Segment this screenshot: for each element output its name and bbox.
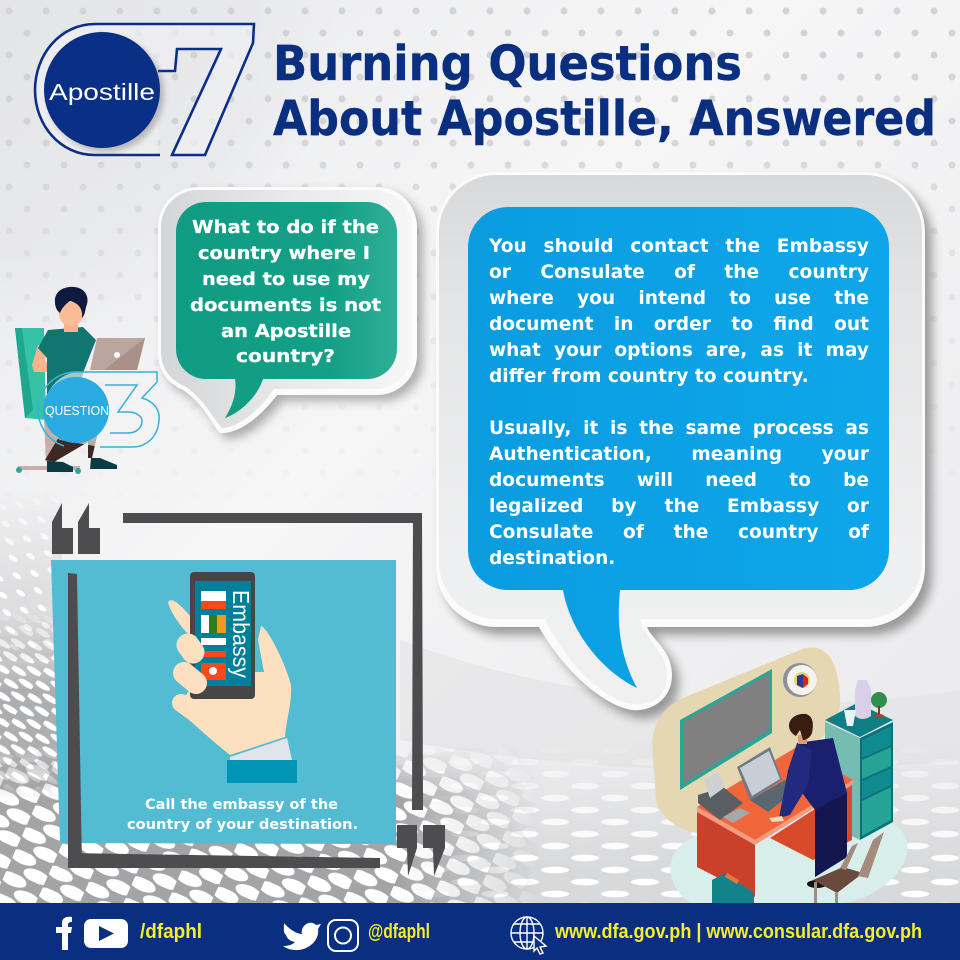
answer text: legalized by the Embassy or: [489, 496, 869, 517]
closing quote marks: [397, 825, 445, 876]
fax: [698, 772, 750, 823]
answer text: where you intend to use the: [489, 288, 869, 309]
frame lines: [68, 513, 423, 868]
websites: www.dfa.gov.ph | www.consular.dfa.gov.ph: [554, 921, 922, 943]
logo: Apostille 7: Apostille: [49, 79, 155, 105]
title: [273, 36, 936, 147]
illustration: officer at desk: [652, 647, 908, 903]
title: Burning Questions: [273, 36, 742, 92]
footer bar: [0, 903, 960, 960]
answer text: document in order to find out: [489, 314, 869, 335]
question text: an Apostille: [221, 321, 351, 342]
speech bubble: answer: [436, 172, 932, 718]
icon: hand holding phone: Embassy: [228, 590, 254, 678]
answer text: Usually, it is the same process as: [489, 418, 869, 439]
icon: twitter: [283, 923, 321, 950]
question 3 badge: [38, 372, 159, 447]
answer text: Authentication, meaning your: [489, 444, 869, 465]
speech bubble: question: [158, 187, 423, 439]
caption: [127, 797, 358, 833]
answer text: You should contact the Embassy: [489, 236, 869, 257]
answer text: or Consulate of the country: [489, 262, 869, 283]
chair: [813, 832, 884, 903]
briefcase: [712, 873, 754, 903]
question text: country?: [236, 346, 335, 367]
laptop: [737, 747, 792, 812]
caption: country of your destination.: [127, 817, 358, 833]
answer text: differ from country to country.: [489, 366, 809, 387]
quote frame with call card: [51, 503, 445, 876]
logo: Apostille 7: [35, 24, 254, 155]
question text: documents is not: [190, 295, 381, 316]
answer text: destination.: [489, 548, 615, 569]
icon: instagram: [328, 920, 358, 951]
seal: [783, 663, 817, 697]
caption: Call the embassy of the: [145, 797, 338, 813]
handle: twitter instagram: @dfaphl: [368, 921, 430, 943]
icon: facebook: [56, 917, 72, 950]
answer text: documents will need to be: [489, 470, 869, 491]
desk: [697, 748, 853, 897]
handle: facebook youtube: /dfaphl: [140, 921, 202, 943]
answer text: what your options are, as it may: [489, 340, 869, 361]
cabinet: [825, 680, 893, 840]
answer text: [488, 236, 870, 569]
question 3 badge: QUESTION: [45, 404, 109, 418]
question text: [190, 217, 381, 367]
screen: [680, 669, 772, 790]
icon: hand holding phone: [168, 572, 297, 783]
illustration: person with laptop: [15, 287, 159, 474]
icon: youtube: [84, 919, 128, 948]
opening quote marks: [52, 503, 100, 554]
card: [51, 560, 396, 844]
question text: What to do if the: [192, 217, 379, 238]
question text: country where I: [198, 243, 370, 264]
answer text: Consulate of the country of: [489, 522, 869, 543]
icon: globe with cursor: [511, 917, 546, 954]
question text: need to use my: [202, 269, 370, 290]
man: [769, 714, 847, 888]
